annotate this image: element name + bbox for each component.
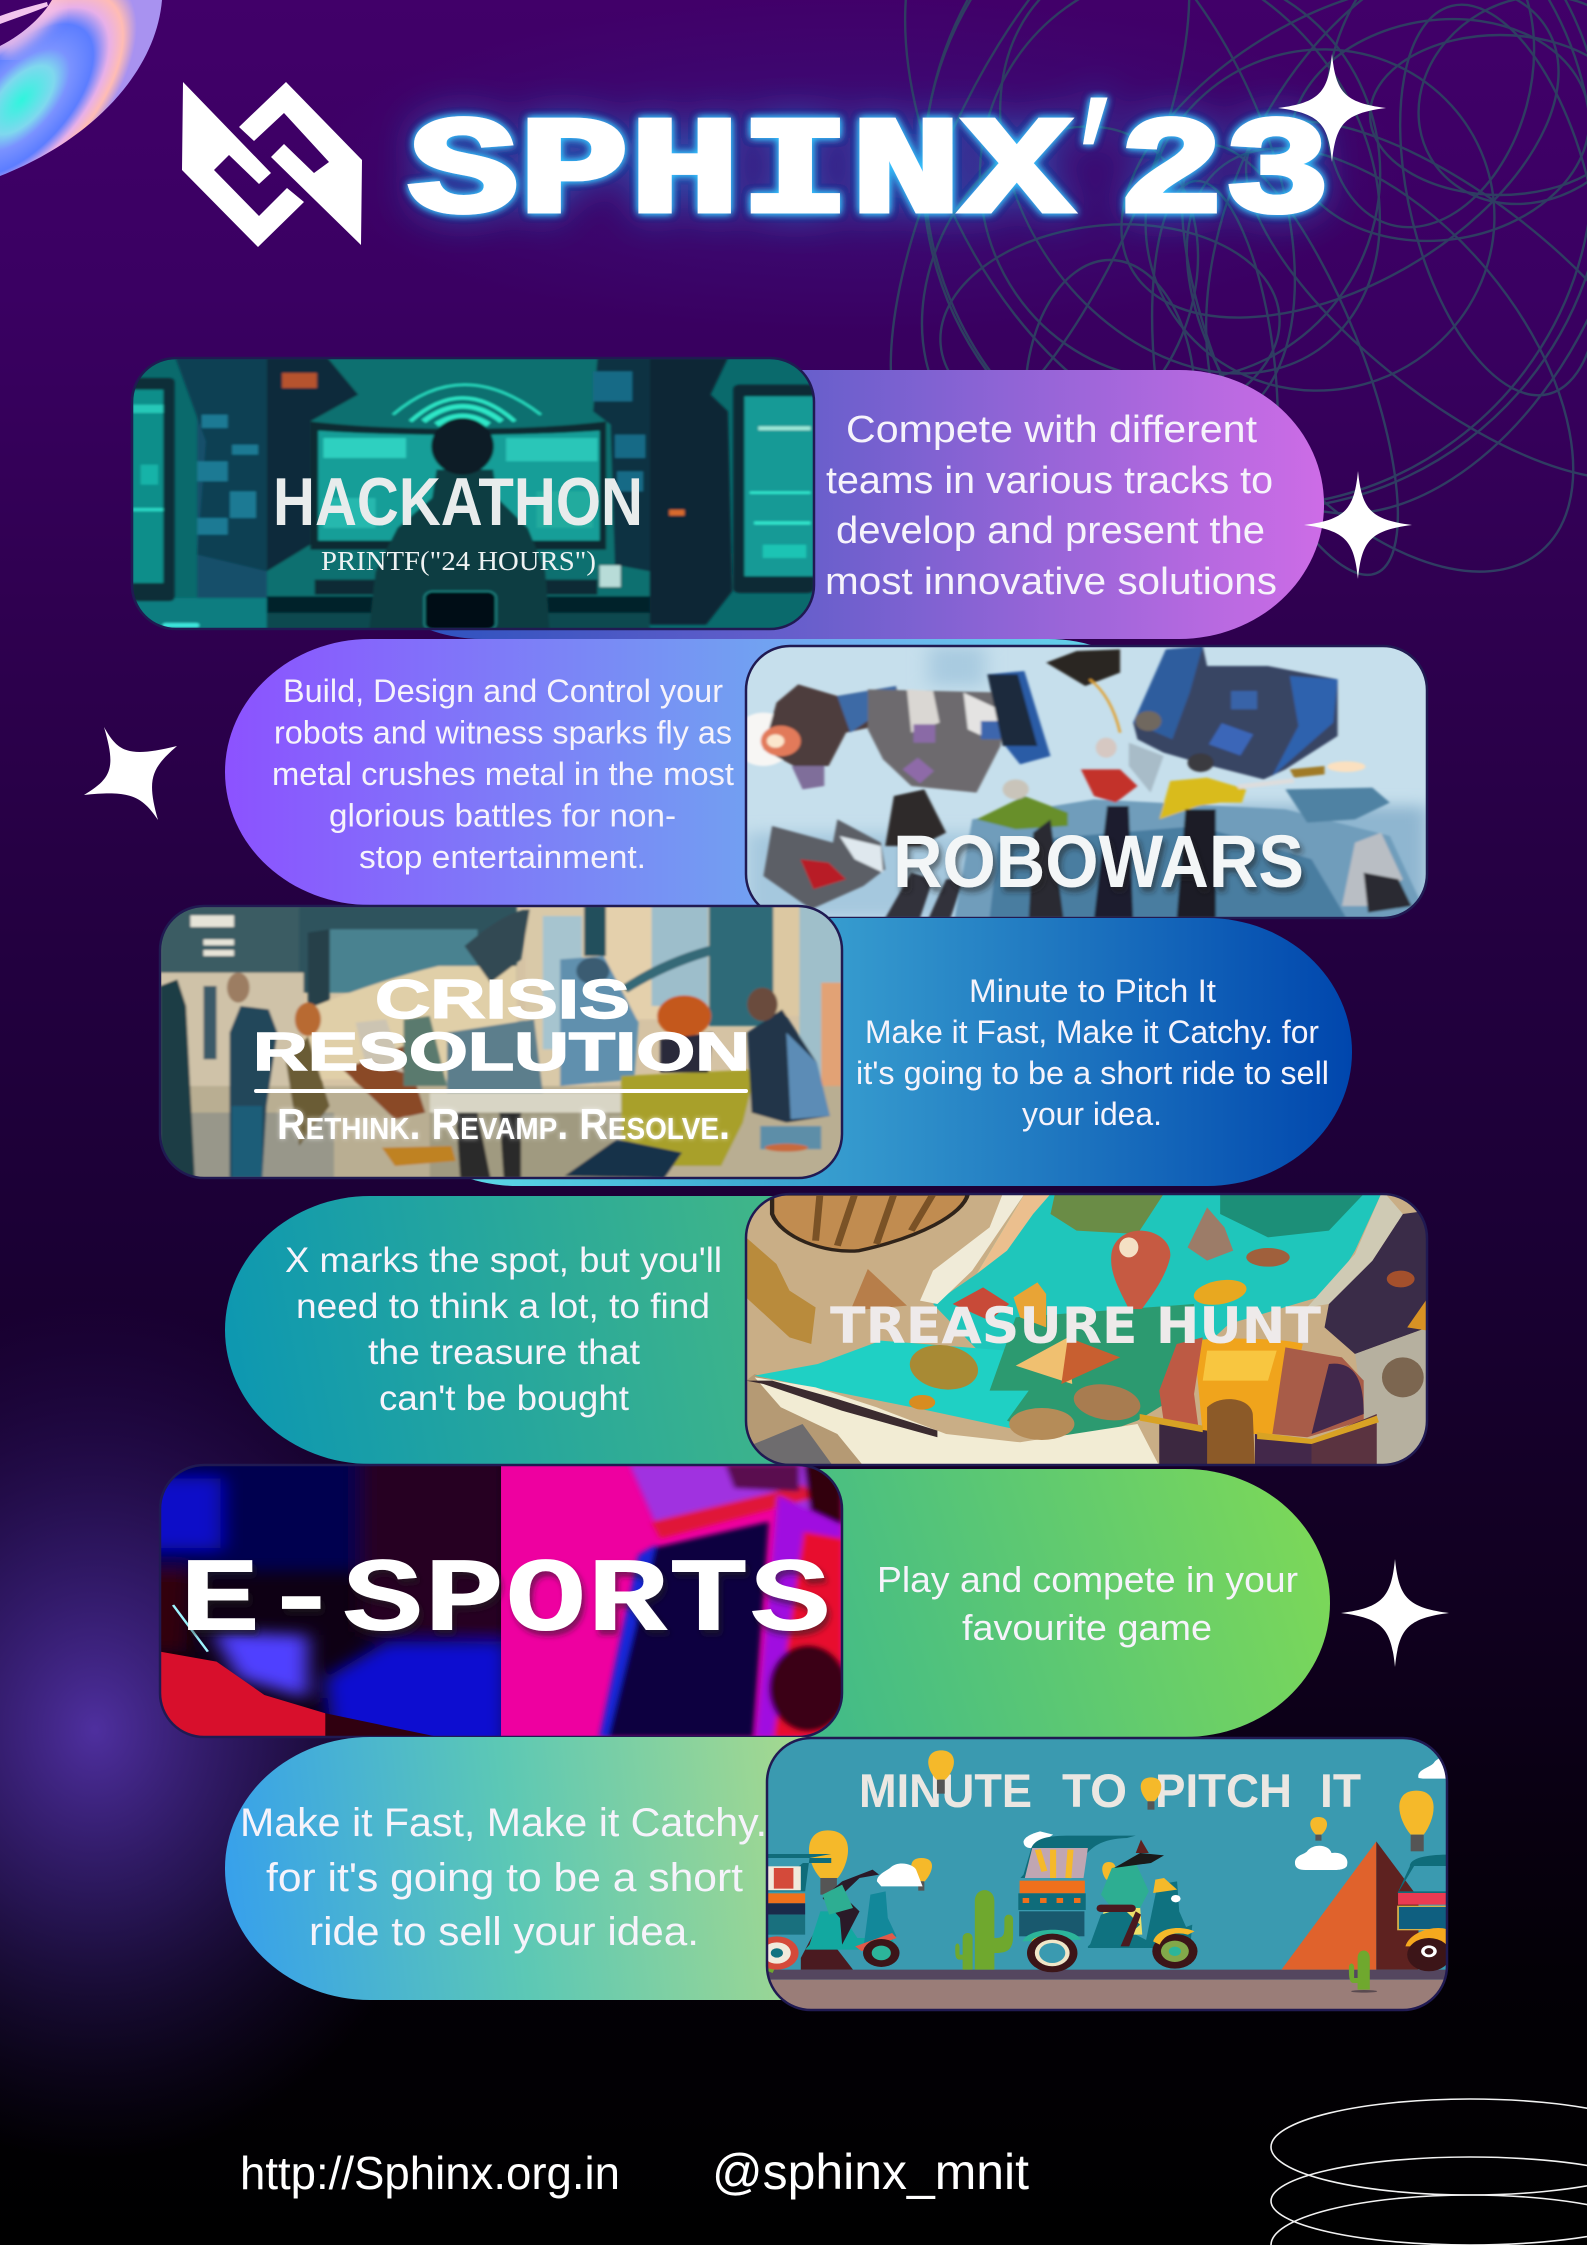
image: minute to pitch it: TO [1062,1764,1127,1817]
pill: hackathon description [337,370,1324,639]
pill: hackathon description: most innovative solutions [825,561,1277,603]
sparkle: hackathon [1304,471,1412,579]
image: hackathon: PRINTF("24 HOURS") [321,546,596,576]
image: hackathon: HACKATHON [273,464,643,540]
pill: hackathon description: Compete with different [846,409,1257,451]
pill: treasure hunt description: can't be bought [379,1379,629,1418]
pill: e-sports description: Play and compete in your [877,1559,1298,1600]
pill: e-sports description: favourite game [962,1607,1212,1648]
pill: minute to pitch it description: Make it Fast, Make it Catchy. [240,1801,767,1845]
pill: robowars description: Build, Design and Control your [283,673,723,709]
pill: robowars description: metal crushes metal in the most [272,756,734,792]
panel: treasure hunt [225,1194,1428,1466]
pill: crisis resolution description: it's going to be a short ride to sell [856,1055,1329,1091]
sparkle: title [1278,54,1386,162]
pill: robowars description: stop entertainment. [359,839,646,875]
pill: crisis resolution description: Minute to Pitch It [969,973,1216,1009]
pill: treasure hunt description: X marks the spot, but you'll [285,1241,722,1280]
title: 23 [1118,97,1330,253]
pill: e-sports description [310,1469,1330,1737]
sparkle: robowars [84,727,177,820]
image: minute to pitch it [755,1738,1451,2010]
image: e-sports [161,1466,841,1736]
image: minute to pitch it: MINUTE [859,1764,1032,1817]
image: crisis resolution [160,906,842,1178]
image: robowars: ROBOWARS [893,820,1304,903]
image: treasure hunt: TREASURE HUNT [830,1297,1321,1355]
pill: crisis resolution description [372,918,1352,1186]
image: crisis resolution: Rethink. Revamp. Resolve. [277,1100,730,1149]
image: minute to pitch it: IT [1320,1764,1361,1817]
footer: website: http://Sphinx.org.in [240,2147,620,2199]
logo [182,82,362,247]
image: crisis resolution: CRISIS [375,968,630,1030]
panel: hackathon [132,358,1324,639]
pill: treasure hunt description: need to think a lot, to find [296,1287,710,1326]
panel: minute to pitch it [225,1737,1451,2010]
globe wireframe [796,0,1587,642]
pill: crisis resolution description: Make it Fast, Make it Catchy. for [865,1014,1319,1050]
footer: instagram handle: @sphinx_mnit [712,2144,1029,2200]
pill: treasure hunt description [225,1196,1245,1464]
image: minute to pitch it: PITCH [1155,1764,1292,1817]
sparkle: e-sports [1341,1559,1449,1667]
holographic shape [0,0,162,176]
panel: crisis resolution [160,906,1352,1186]
pill: robowars description: glorious battles for non- [329,798,676,834]
image: robowars [733,646,1428,918]
pill: minute to pitch it description [225,1737,1236,2000]
pill: treasure hunt description: the treasure that [368,1333,640,1372]
pill: minute to pitch it description: for it's going to be a short [266,1856,743,1900]
pill: robowars description: robots and witness sparks fly as [274,714,732,750]
pill: hackathon description: teams in various tracks to [826,460,1273,502]
panel: e-sports [158,1464,1330,1738]
image: crisis resolution: RESOLUTION [253,1022,750,1082]
panel: robowars [225,639,1428,918]
pill: robowars description [225,639,1193,905]
decorative rings [1271,2099,1587,2245]
image: treasure hunt [746,1194,1428,1466]
image: e-sports: E-SPORTS [179,1542,831,1662]
pill: crisis resolution description: your idea. [1022,1096,1162,1132]
image: hackathon [132,358,814,630]
title: SPHINX [408,97,1072,253]
pill: minute to pitch it description: ride to sell your idea. [309,1910,699,1954]
title [408,86,1330,253]
title: ’ [1070,86,1120,242]
pill: hackathon description: develop and present the [836,510,1265,552]
